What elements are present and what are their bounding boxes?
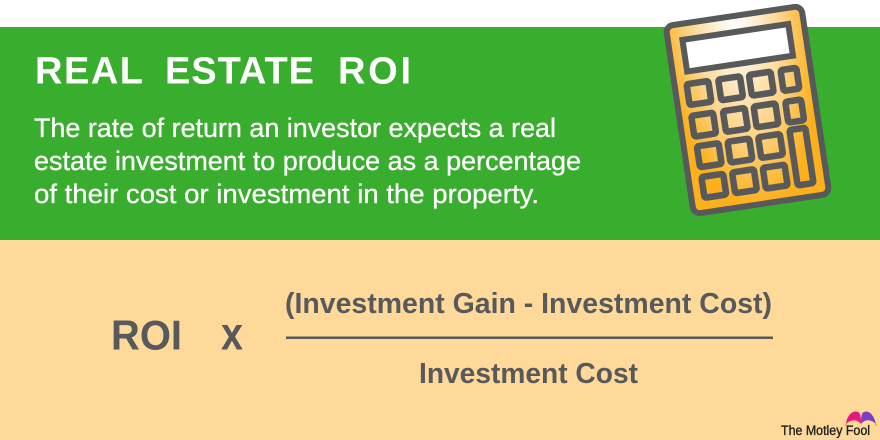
panel: white top strip xyxy=(0,0,880,27)
logo: The Motley Fool xyxy=(781,412,877,438)
icon: jester hat xyxy=(845,412,877,426)
formula denominator: Investment Cost xyxy=(419,358,638,390)
definition text: The rate of return an investor expects a real xyxy=(34,113,556,143)
title: ESTATE xyxy=(165,50,314,92)
panel: formula background xyxy=(0,240,880,440)
panel: green header xyxy=(0,27,880,240)
formula multiply sign: x xyxy=(221,308,243,360)
formula fraction bar xyxy=(286,336,773,339)
definition text: of their cost or investment in the property. xyxy=(34,179,539,209)
logo wordmark: The Motley Fool xyxy=(781,423,870,438)
title xyxy=(35,50,411,92)
formula label: ROI: ROI xyxy=(111,312,182,358)
definition text xyxy=(34,113,581,209)
formula numerator: (Investment Gain - Investment Cost) xyxy=(285,288,772,320)
definition text: estate investment to produce as a percentage xyxy=(34,146,581,176)
title: ROI xyxy=(338,50,411,92)
icon: calculator xyxy=(666,6,829,214)
title: REAL xyxy=(35,50,143,92)
